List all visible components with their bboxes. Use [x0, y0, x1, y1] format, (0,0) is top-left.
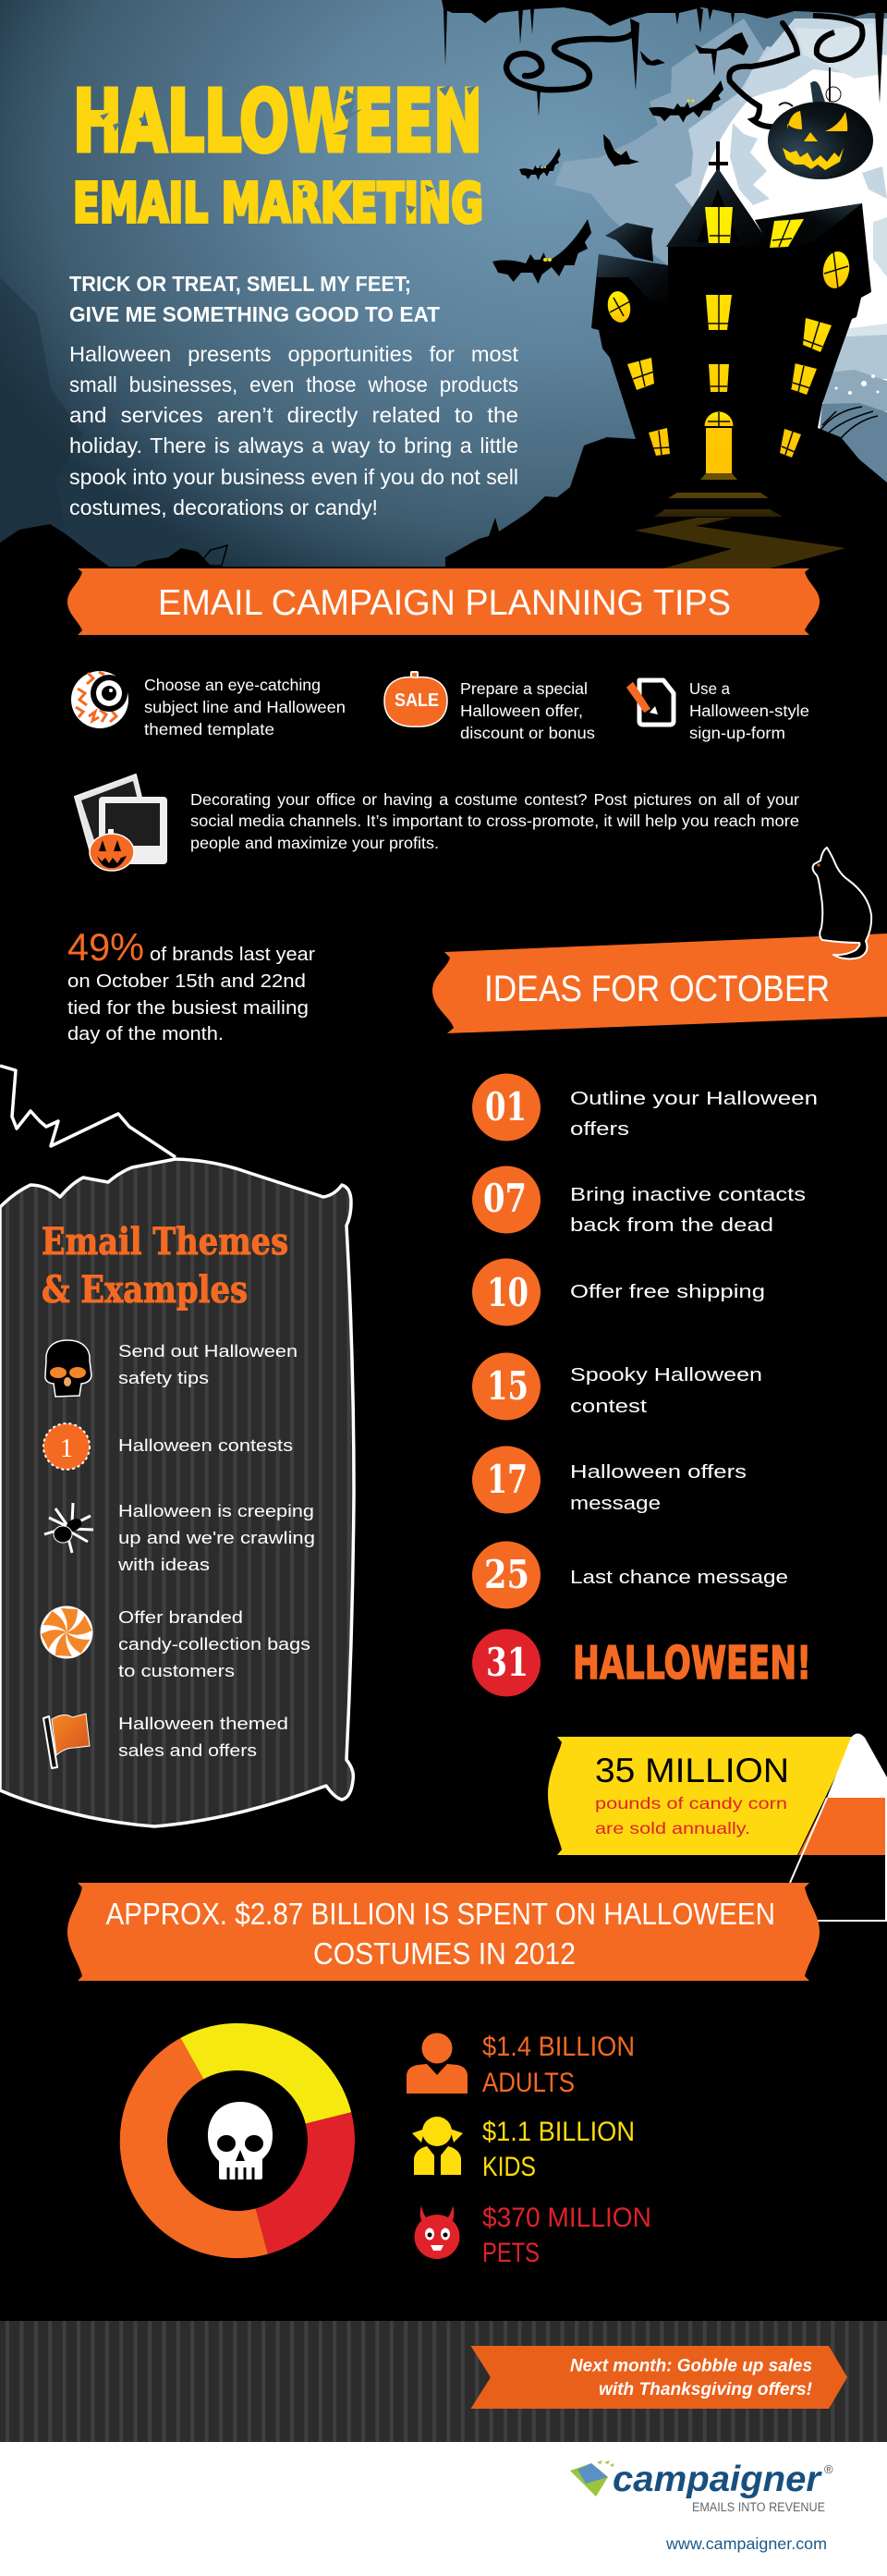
icon: sale pumpkin — [384, 671, 447, 726]
subheading: GIVE ME SOMETHING GOOD TO EAT — [69, 302, 440, 326]
stat: 49 percent — [67, 925, 315, 1044]
icon: document with pencil — [621, 680, 674, 725]
day 17: 17 — [487, 1457, 528, 1502]
item: candy bags: to customers — [118, 1661, 235, 1680]
stat: 49 percent: day of the month. — [67, 1024, 224, 1044]
footer white — [0, 2442, 887, 2576]
stat: 49 percent: 49% — [67, 925, 144, 969]
item: creeping spider: up and we're crawling — [118, 1528, 315, 1547]
arrow: next month: with Thanksgiving offers! — [599, 2379, 812, 2399]
item: contests: 1 — [60, 1435, 73, 1463]
item: safety tips: Send out Halloween — [118, 1341, 298, 1361]
callout: candy corn stat — [548, 1734, 887, 1921]
subheading: TRICK OR TREAT, SMELL MY FEET; — [69, 272, 411, 296]
logo: campaigner: campaigner — [613, 2460, 822, 2499]
october calendar list — [472, 1074, 818, 1697]
legend: kids: KIDS — [482, 2152, 536, 2182]
tip text: people and maximize your profits. — [190, 834, 439, 852]
panel heading — [42, 1220, 288, 1312]
stat: 49 percent: on October 15th and 22nd — [67, 971, 306, 992]
icon: eyeball — [71, 671, 128, 728]
banner: ideas for october: IDEAS FOR OCTOBER — [484, 969, 830, 1009]
tip text: Prepare a special — [460, 679, 588, 698]
icon: sale pumpkin: SALE — [395, 690, 439, 711]
icon: candy corn — [790, 1734, 887, 1921]
legend: adults: $1.4 BILLION — [482, 2032, 635, 2062]
day 15: 15 — [487, 1363, 529, 1409]
arrow: next month: Next month: Gobble up sales — [570, 2355, 812, 2375]
website url: www.campaigner.com — [665, 2534, 827, 2553]
tip text: subject line and Halloween — [144, 698, 346, 716]
logo: campaigner: EMAILS INTO REVENUE — [692, 2500, 825, 2514]
tip: sign-up form — [621, 679, 809, 742]
item: candy bags: Offer branded — [118, 1607, 243, 1627]
tip text: Halloween-style — [689, 702, 809, 720]
subheading — [69, 272, 440, 326]
banner: email campaign planning tips: EMAIL CAMPAIGN PLANNING TIPS — [158, 583, 731, 623]
callout: candy corn stat: 35 MILLION — [595, 1752, 789, 1789]
legend: pets — [414, 2203, 651, 2268]
tree branches — [442, 0, 887, 127]
tip text: Halloween offer, — [460, 702, 583, 720]
donut chart — [120, 2023, 355, 2258]
arrow: next month — [471, 2346, 847, 2409]
callout: candy corn stat: pounds of candy corn — [595, 1794, 787, 1813]
intro paragraph: small businesses, even those whose products — [69, 372, 518, 397]
day 01: offers — [570, 1119, 629, 1140]
legend: kids: $1.1 BILLION — [482, 2117, 635, 2147]
day 01: 01 — [485, 1084, 527, 1129]
stat: 49 percent: of brands last year — [150, 945, 315, 965]
legend: adults: ADULTS — [482, 2068, 575, 2098]
item: creeping spider: with ideas — [117, 1555, 210, 1574]
day 17: Halloween offers — [570, 1462, 747, 1483]
item: safety tips: safety tips — [118, 1368, 209, 1387]
callout: candy corn stat: are sold annually. — [595, 1819, 750, 1837]
item: sales and offers: Halloween themed — [118, 1714, 288, 1733]
day 25: 25 — [484, 1552, 529, 1597]
banner: costumes spending: APPROX. $2.87 BILLION IS SPENT ON HALLOWEEN — [105, 1897, 775, 1931]
tip text: Choose an eye-catching — [144, 676, 321, 694]
day 10: 10 — [487, 1270, 529, 1315]
item: sales and offers: sales and offers — [118, 1740, 257, 1760]
tip: eye-catching subject line — [71, 671, 346, 739]
day 15: contest — [570, 1397, 648, 1417]
day 25: Last chance message — [570, 1568, 788, 1588]
tip text: discount or bonus — [460, 724, 595, 742]
bats — [492, 51, 723, 284]
item: contests: Halloween contests — [118, 1435, 293, 1455]
stat: 49 percent: tied for the busiest mailing — [67, 998, 309, 1019]
day 01: Outline your Halloween — [570, 1089, 818, 1109]
day 15: Spooky Halloween — [570, 1365, 762, 1386]
legend: pets: $370 MILLION — [482, 2203, 651, 2233]
tip text: Decorating your office or having a costume contest? Post pictures on all of your — [190, 790, 799, 809]
item: creeping spider: Halloween is creeping — [118, 1501, 314, 1520]
day 10 — [472, 1259, 765, 1325]
logo: campaigner: ® — [824, 2462, 833, 2476]
day 07: Bring inactive contacts — [570, 1185, 806, 1205]
icon: hanging pumpkin — [768, 67, 873, 179]
day 07: back from the dead — [570, 1215, 773, 1236]
icon: photos and pumpkin — [75, 775, 167, 871]
item: safety tips — [45, 1340, 298, 1397]
title distress marks — [100, 85, 476, 214]
logo: campaigner — [570, 2460, 833, 2514]
icon: envelope — [570, 2460, 614, 2497]
intro paragraph — [69, 342, 519, 519]
day 25 — [472, 1542, 788, 1608]
panel heading: & Examples — [42, 1268, 248, 1312]
tip text: Use a — [689, 679, 730, 698]
item: creeping spider — [44, 1501, 315, 1574]
legend: pets: PETS — [482, 2238, 540, 2268]
day 17: message — [570, 1494, 661, 1514]
icon: cat outline — [813, 848, 871, 958]
tip text — [144, 676, 346, 739]
tip text — [190, 790, 799, 852]
item: sales and offers — [43, 1714, 288, 1768]
banner: costumes spending: COSTUMES IN 2012 — [313, 1936, 576, 1971]
legend: adults — [407, 2032, 635, 2098]
day 07 — [472, 1166, 806, 1236]
legend: kids — [412, 2117, 635, 2182]
panel heading: Email Themes — [42, 1220, 288, 1264]
tip: post pictures — [75, 775, 799, 871]
banner: email campaign planning tips — [67, 568, 820, 635]
title: HALLOWEEN — [73, 72, 482, 171]
day 07: 07 — [483, 1176, 527, 1221]
day 01 — [472, 1074, 818, 1141]
day 17 — [472, 1446, 747, 1514]
title: EMAIL MARKETING — [73, 171, 483, 235]
banner: costumes spending — [67, 1883, 820, 1981]
icon: skull — [208, 2102, 273, 2179]
tip text: social media channels. It’s important to cross-promote, it will help you reach more — [190, 812, 799, 830]
day 31: 31 — [486, 1640, 529, 1685]
panel: email themes and examples — [0, 1066, 354, 1826]
haunted house — [0, 141, 887, 592]
item: candy bags — [40, 1606, 310, 1680]
tip: special offer — [384, 671, 595, 742]
item: contests — [43, 1423, 293, 1470]
intro paragraph: costumes, decorations or candy! — [69, 495, 378, 519]
item: candy bags: candy-collection bags — [118, 1634, 310, 1654]
tip text — [460, 679, 595, 742]
banner: ideas for october — [432, 934, 887, 1033]
title — [73, 72, 483, 235]
tip text — [689, 679, 809, 742]
intro paragraph: and services aren’t directly related to the — [69, 403, 518, 427]
day 31 — [472, 1629, 811, 1697]
hero illustration — [0, 0, 887, 592]
intro paragraph: holiday. There is always a way to bring a little — [69, 433, 518, 458]
footer band — [0, 2321, 887, 2442]
tip text: sign-up-form — [689, 724, 785, 742]
day 10: Offer free shipping — [570, 1282, 765, 1302]
intro paragraph: Halloween presents opportunities for most — [69, 342, 519, 366]
tip text: themed template — [144, 720, 274, 739]
intro paragraph: spook into your business even if you do not sell — [69, 465, 518, 489]
day 15 — [472, 1353, 762, 1420]
